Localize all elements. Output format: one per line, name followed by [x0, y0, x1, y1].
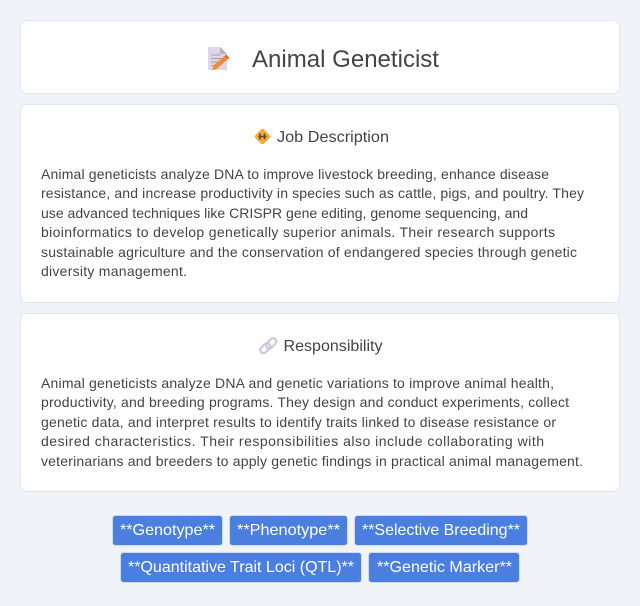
- text block: responsibility: productivity, and breeding programs. They design and conduct experiments, collect: [41, 394, 569, 410]
- tag: quantitative trait loci: [120, 552, 362, 582]
- text block: responsibility: genetic data, and interpret results to identify traits linked to disease resistance or: [41, 414, 556, 430]
- text block: job description: Animal geneticists analyze DNA to improve livestock breeding, enhance disease: [41, 166, 549, 182]
- icon: construction diamond: [254, 128, 271, 145]
- tag: genetic marker: **Genetic Marker**: [377, 559, 512, 576]
- title: Animal Geneticist: [252, 46, 439, 73]
- panel: title card: [20, 20, 620, 94]
- tag: phenotype: [230, 516, 348, 546]
- text block: job description: resistance, and increase productivity in species such as cattle, pigs, and poultry. They: [41, 185, 584, 201]
- text block: responsibility: veterinarians and breeders to apply genetic findings in practical animal management.: [41, 453, 583, 469]
- text block: responsibility: desired characteristics. Their responsibilities also include collaborating with: [41, 433, 544, 449]
- tag: genetic marker: [368, 552, 520, 582]
- text block: job description: diversity management.: [41, 263, 187, 279]
- icon: link: [259, 337, 278, 355]
- heading: responsibility: Responsibility: [284, 338, 382, 355]
- panel: job description: [20, 104, 620, 302]
- text block: job description: bioinformatics to develop genetically superior animals. Their research supports: [41, 224, 555, 240]
- text block: job description: sustainable agriculture and the conservation of endangered species through genetic: [41, 244, 577, 260]
- panel: responsibility: [20, 314, 620, 492]
- text block: responsibility: [41, 375, 583, 469]
- tag: genotype: **Genotype**: [120, 522, 215, 539]
- tag: selective breeding: [354, 516, 528, 546]
- tags: [112, 516, 528, 582]
- heading: job description: Job Description: [277, 129, 389, 146]
- icon: memo with pencil: [208, 47, 230, 70]
- text block: responsibility: Animal geneticists analyze DNA and genetic variations to improve animal health,: [41, 375, 554, 391]
- tag: phenotype: **Phenotype**: [237, 522, 340, 539]
- text block: job description: use advanced techniques like CRISPR gene editing, genome sequencing, and: [41, 205, 528, 221]
- text block: job description: [41, 166, 584, 279]
- tag: selective breeding: **Selective Breeding**: [362, 522, 520, 539]
- tag: quantitative trait loci: **Quantitative Trait Loci (QTL)**: [128, 559, 354, 576]
- tag: genotype: [112, 516, 222, 546]
